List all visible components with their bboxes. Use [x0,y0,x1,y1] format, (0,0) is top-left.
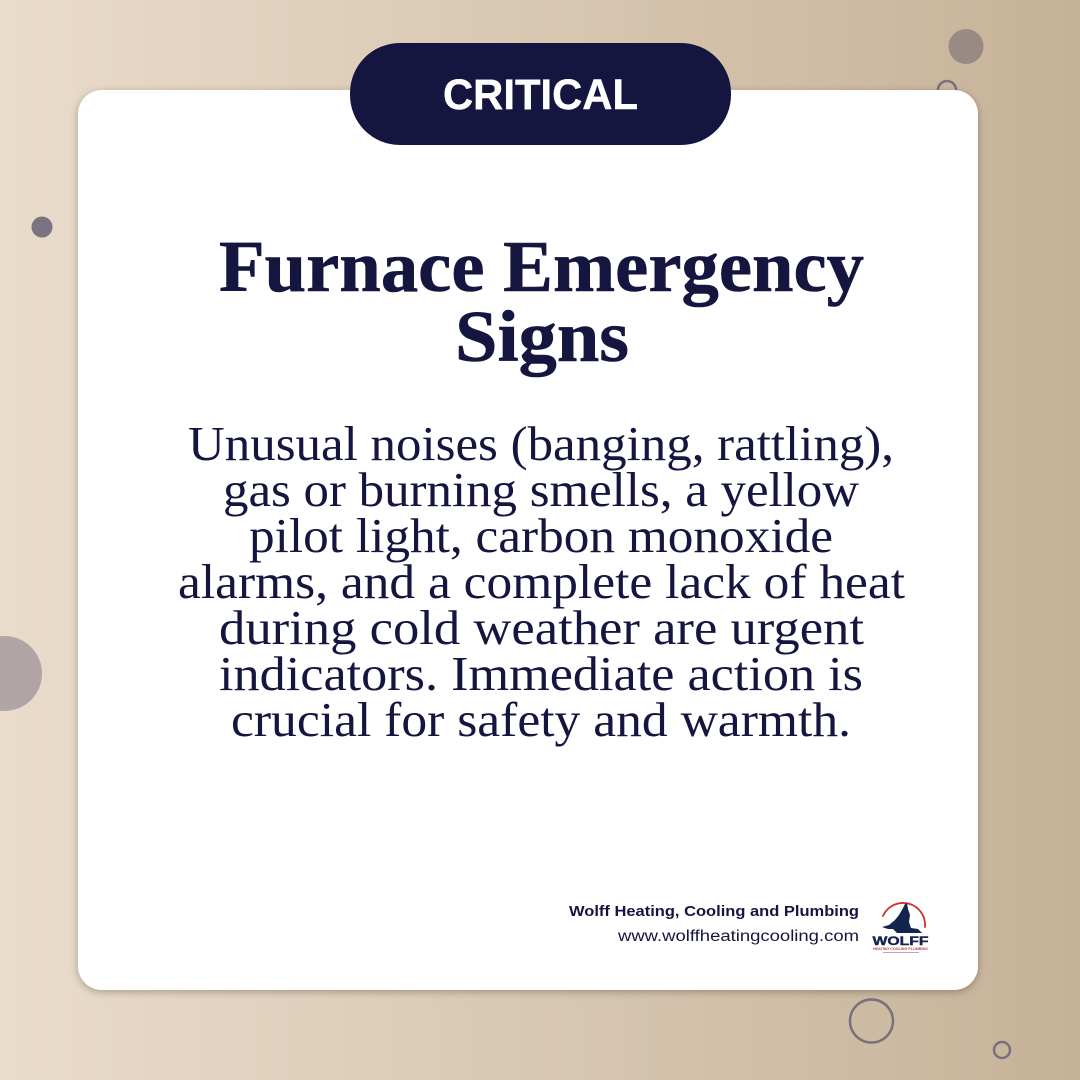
title [219,226,864,377]
badge: critical: CRITICAL [443,71,638,119]
body text: Unusual noises (banging, rattling), [188,416,894,471]
body text: crucial for safety and warmth. [231,692,851,747]
badge: critical [350,43,731,145]
icon: wolff logo: HEATING COOLING PLUMBING [873,946,928,951]
title: Signs [455,296,629,377]
body text [178,416,905,747]
body text: gas or burning smells, a yellow [223,462,860,517]
icon: wolff logo [872,903,928,953]
body text: indicators. Immediate action is [219,646,863,701]
footer company text: Wolff Heating, Cooling and Plumbing [569,903,859,920]
body text: pilot light, carbon monoxide [249,508,833,563]
footer company text: www.wolffheatingcooling.com [617,928,859,945]
panel: white card [78,90,978,990]
title: Furnace Emergency [219,226,864,307]
icon: wolff logo: WOLFF [872,934,928,948]
body text: during cold weather are urgent [219,600,864,655]
footer company text [569,903,859,945]
body text: alarms, and a complete lack of heat [178,554,905,609]
